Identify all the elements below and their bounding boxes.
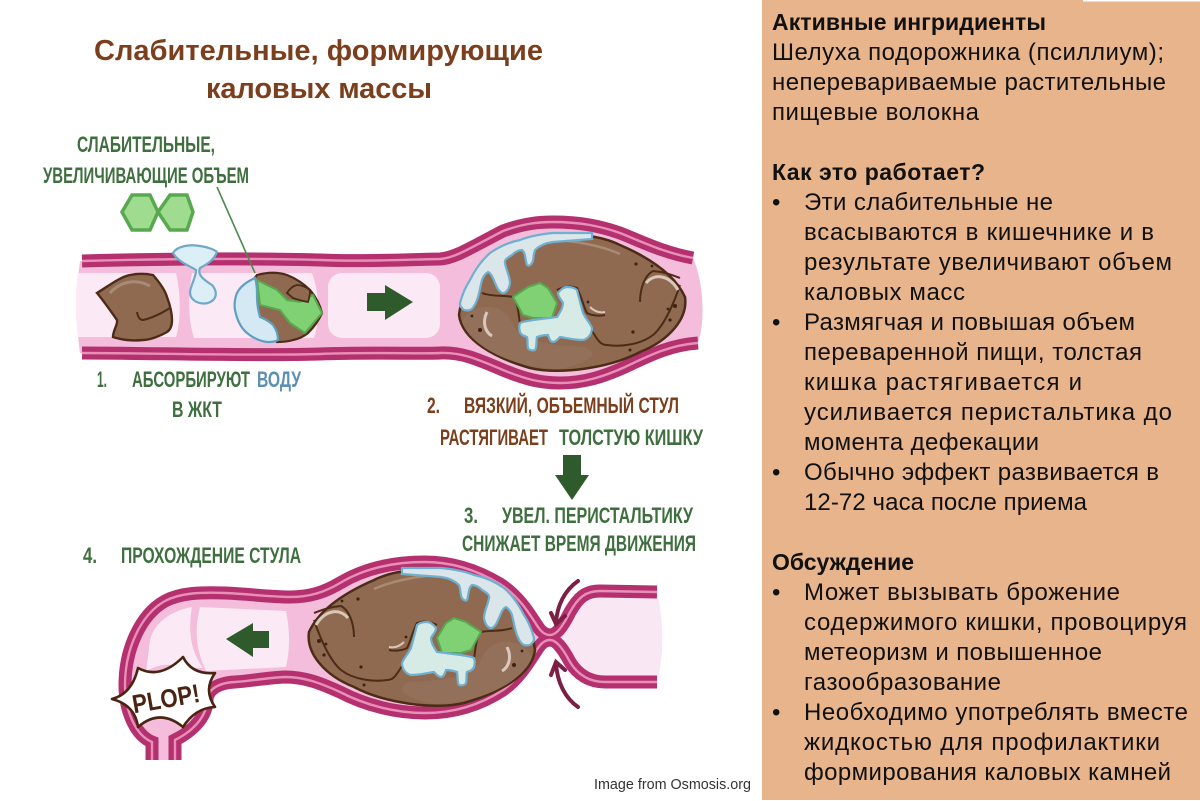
- label: bulk-forming laxatives: СЛАБИТЕЛЬНЫЕ,: [77, 132, 215, 157]
- step 1 text: 1.: [97, 367, 107, 392]
- title: [94, 35, 543, 105]
- step 2 text: ВЯЗКИЙ, ОБЪЕМНЫЙ СТУЛ: [464, 393, 679, 418]
- lighter lumen segments: [76, 273, 440, 338]
- step 3 text: СНИЖАЕТ ВРЕМЯ ДВИЖЕНИЯ: [462, 531, 696, 556]
- step 2 text: 2.: [427, 393, 440, 418]
- section: how it works: •: [772, 309, 780, 336]
- section: discussion: формирования каловых камней: [804, 759, 1171, 786]
- section: active ingredients: неперевариваемые растительные: [772, 69, 1166, 96]
- step 2 text: РАСТЯГИВАЕТ: [440, 425, 548, 450]
- pointer line: [217, 187, 255, 273]
- arrow: left: [226, 623, 269, 657]
- section: discussion: Может вызывать брожение: [804, 579, 1120, 606]
- water drop: [173, 245, 217, 303]
- expanded stool, lower: [309, 568, 535, 706]
- step 3 text: 3.: [464, 503, 478, 528]
- section: discussion: метеоризм и повышенное: [804, 639, 1102, 666]
- step 1 text: АБСОРБИРУЮТ: [132, 367, 250, 392]
- step 4 text: 4.: [83, 543, 97, 568]
- step 4 text: ПРОХОЖДЕНИЕ СТУЛА: [121, 543, 301, 568]
- stool with laxative: [235, 273, 322, 342]
- section: active ingredients: Шелуха подорожника (псиллиум);: [772, 39, 1164, 66]
- title: Слабительные, формирующие: [94, 35, 543, 67]
- label: bulk-forming laxatives: [43, 132, 249, 188]
- section: how it works: переваренной пищи, толстая: [804, 339, 1142, 366]
- step 4 text: [83, 543, 301, 568]
- section: discussion: •: [772, 579, 780, 606]
- section: how it works: момента дефекации: [804, 429, 1039, 456]
- section: active ingredients: пищевые волокна: [772, 99, 980, 126]
- label: bulk-forming laxatives: УВЕЛИЧИВАЮЩИЕ ОБЪЕМ: [43, 163, 249, 188]
- section: how it works: Эти слабительные не: [804, 189, 1053, 216]
- arrow: down: [555, 455, 589, 500]
- lower tube fill: [125, 562, 550, 760]
- section: discussion: содержимого кишки, провоцируя: [804, 609, 1187, 636]
- section: discussion: [772, 549, 1188, 786]
- section: discussion: Необходимо употреблять вместе: [804, 699, 1188, 726]
- right segment beyond the constriction: [550, 591, 662, 682]
- arrow: contraction upper: [551, 581, 578, 624]
- section: how it works: результате увеличивают объем: [804, 249, 1172, 276]
- step 3 text: [462, 503, 696, 556]
- section: discussion: жидкостью для профилактики: [804, 729, 1160, 756]
- arrow: right: [367, 285, 413, 320]
- section: how it works: Как это работает?: [772, 159, 985, 185]
- title: каловых массы: [206, 73, 432, 105]
- section: discussion: газообразование: [804, 669, 1001, 696]
- step 1 text: ВОДУ: [257, 367, 301, 392]
- section: how it works: [772, 159, 1172, 516]
- icon: laxative molecule: [122, 195, 193, 230]
- stool: [97, 274, 172, 340]
- section: how it works: всасываются в кишечнике и в: [804, 219, 1154, 246]
- illustration: upper intestine: [76, 187, 703, 383]
- arrow: contraction lower: [551, 662, 578, 707]
- section: discussion: Обсуждение: [772, 549, 914, 575]
- section: how it works: Размягчая и повышая объем: [804, 309, 1135, 336]
- expanded stool: [459, 233, 685, 371]
- lower intestine wall: [125, 562, 657, 760]
- section: how it works: усиливается перистальтика до: [804, 399, 1172, 426]
- burst: PLOP: PLOP!: [130, 678, 202, 719]
- section: how it works: Обычно эффект развивается в: [804, 459, 1159, 486]
- section: how it works: каловых масс: [804, 279, 965, 306]
- image credit: Image from Osmosis.org: [594, 776, 751, 793]
- section: discussion: •: [772, 699, 780, 726]
- section: how it works: •: [772, 459, 780, 486]
- intestine wall: [82, 222, 698, 383]
- illustration: lower intestine: [125, 562, 662, 760]
- step 1 text: [97, 367, 301, 422]
- step 2 text: [427, 393, 703, 450]
- section: active ingredients: [772, 9, 1166, 126]
- panel: drug information: [762, 0, 1200, 800]
- step 2 text: ТОЛСТУЮ КИШКУ: [559, 425, 703, 450]
- section: how it works: 12-72 часа после приема: [804, 489, 1088, 516]
- section: active ingredients: Активные ингридиенты: [772, 9, 1046, 35]
- step 3 text: УВЕЛ. ПЕРИСТАЛЬТИКУ: [502, 503, 693, 528]
- intestine tube fill: [77, 222, 703, 383]
- lighter lumen segments: [146, 607, 289, 672]
- burst: PLOP: [112, 657, 215, 727]
- section: how it works: •: [772, 189, 780, 216]
- step 1 text: В ЖКТ: [172, 397, 222, 422]
- section: how it works: кишка растягивается и: [804, 369, 1082, 396]
